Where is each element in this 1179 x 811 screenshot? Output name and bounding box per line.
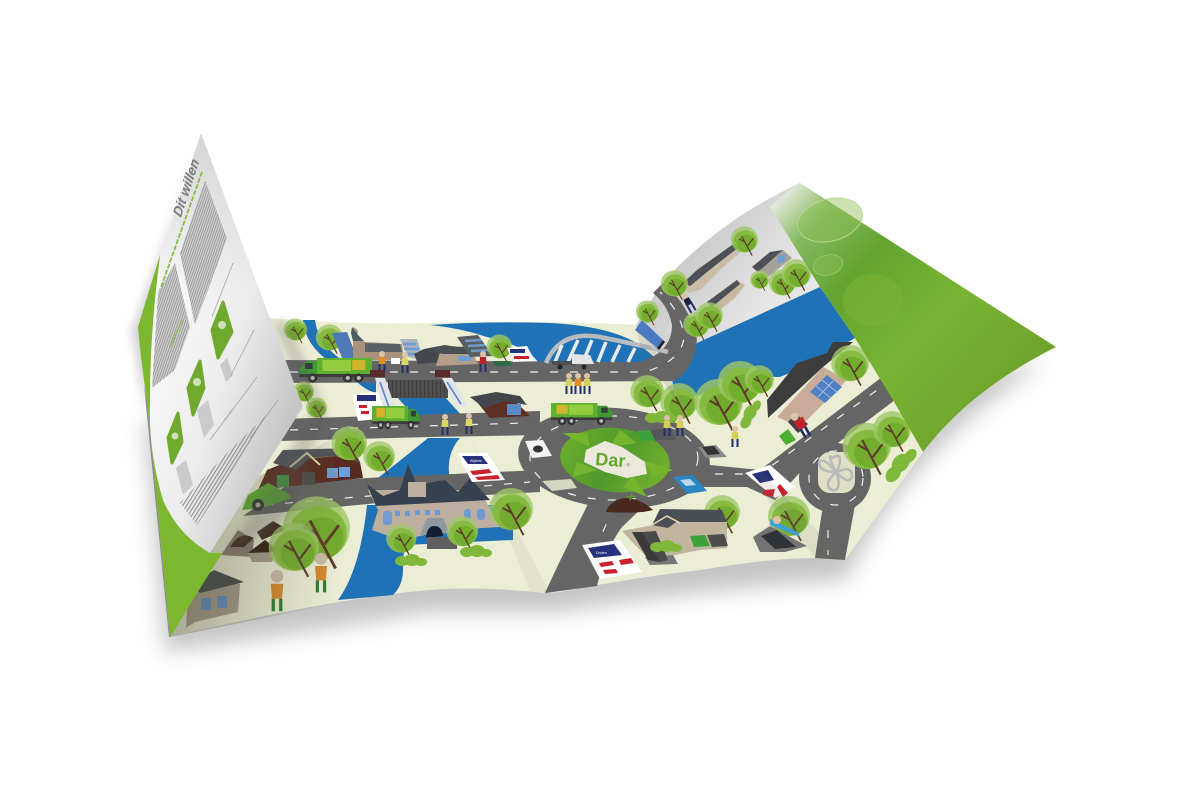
icon: second green square [188, 361, 204, 415]
detached house lower [707, 280, 745, 312]
man in dark [680, 292, 697, 313]
soap bubbles [793, 191, 903, 326]
castle [367, 464, 500, 549]
river: between middle roads [375, 438, 460, 480]
place sign: centre: Wijchen [470, 459, 482, 463]
road: south-east exit [815, 505, 855, 560]
dark bins [788, 414, 808, 433]
blue sign right pylon [442, 378, 468, 407]
solar panel field [635, 320, 665, 350]
place sign: south: Druten [596, 551, 607, 555]
place sign: east [745, 465, 795, 498]
green bin [779, 429, 796, 445]
card on road [542, 479, 577, 491]
left-bottom shading from flap [170, 440, 355, 637]
map panel: base land [170, 183, 1056, 637]
tree group: castle [386, 488, 533, 566]
garbage truck behind flap [242, 475, 292, 511]
tree behind solar office [316, 324, 343, 354]
roundabout: central ring [515, 401, 713, 515]
green section line [170, 320, 182, 347]
bridge: plaza and arch [388, 336, 668, 398]
place sign: middle left [352, 392, 387, 421]
glass building [400, 339, 424, 361]
small text next to icons [176, 358, 233, 495]
trees upper neighbourhood [636, 226, 811, 340]
office block [457, 335, 493, 357]
workers in orange vests [271, 553, 327, 611]
body text column left [152, 263, 190, 388]
house with solar roof [767, 342, 869, 445]
rivers [303, 287, 855, 600]
large trees by workers [269, 496, 350, 577]
workers on road [566, 373, 572, 394]
trees and workers centre right [630, 361, 774, 447]
upper neighbourhood: houses [635, 243, 792, 350]
fold shading [470, 325, 845, 593]
green ring [557, 422, 673, 498]
big brown farmhouse [258, 448, 363, 490]
tree and monument south-east [704, 495, 810, 552]
bike racks on road [370, 370, 450, 377]
road network [243, 283, 895, 593]
flap left soft shadow [132, 150, 198, 410]
cream centre [584, 441, 647, 478]
flower logo island [818, 452, 855, 493]
panel: white folded flap [150, 133, 303, 553]
arch bridge [546, 336, 668, 363]
upper land: housing area [636, 183, 840, 378]
green sub-heading stripe [159, 172, 202, 293]
solar office [332, 332, 357, 358]
compost mounds [221, 521, 287, 562]
dark house [414, 345, 445, 364]
icon: third green square [168, 413, 182, 463]
road markings [265, 292, 880, 555]
green cover panel [770, 183, 1056, 452]
garbage truck middle right [551, 403, 612, 425]
recycling symbol: Dar logo [557, 422, 673, 498]
red figure [789, 410, 813, 439]
orange and yellow figures [378, 351, 386, 372]
tree by office [487, 334, 512, 361]
recycling bins [637, 429, 676, 441]
bottom house with statues [622, 509, 728, 565]
lower text block [180, 410, 272, 525]
compost pile [606, 493, 653, 513]
road: middle street [280, 411, 540, 441]
body text column right [180, 180, 227, 325]
icon: first green square [212, 302, 232, 358]
truck behind bridge [552, 354, 594, 370]
row houses [683, 243, 743, 293]
apex shade [160, 133, 265, 305]
Dar wordmark: Dar [595, 449, 626, 471]
blue fuel pump [673, 475, 707, 494]
brown house [470, 392, 530, 418]
paper drop shadow [145, 362, 1045, 652]
bottom-left house [186, 570, 244, 628]
white washing machine [525, 440, 552, 458]
river: large right river [672, 287, 855, 400]
recycling arrows [562, 430, 673, 497]
place sign: south [582, 540, 642, 579]
island: east roundabout [818, 452, 855, 493]
sweepers on middle street [442, 413, 472, 435]
buildings along upper street [299, 324, 594, 416]
garbage truck on upper street [299, 358, 372, 382]
flap shadow [225, 322, 326, 556]
road: south exit [545, 500, 645, 593]
trees right lower [843, 411, 919, 485]
river: top bay [430, 322, 672, 372]
church [352, 327, 404, 360]
Dar wordmark: ® [625, 461, 631, 468]
panel: grey inner edge [144, 385, 170, 637]
panel: green back fold [138, 255, 222, 637]
heading: Dit willen [170, 156, 202, 219]
river: top left strip [303, 320, 345, 362]
blue sign left pylon [375, 378, 398, 416]
place sign: centre [457, 453, 505, 482]
river: under bridge plaza [357, 382, 464, 418]
detached house right [752, 250, 792, 277]
red figure [480, 351, 486, 372]
roundabout: east ring [799, 443, 871, 513]
tan house [436, 346, 478, 366]
manhole [698, 445, 727, 458]
road: upper street with curve [280, 283, 697, 383]
sign [507, 346, 535, 362]
green bins [493, 361, 512, 366]
tree group: top left [284, 318, 327, 420]
green-tint icons detail [172, 321, 226, 440]
road: lower street [243, 470, 540, 516]
tree group: farmhouse [331, 426, 395, 475]
thin text lines [210, 263, 278, 440]
river: castle moat and lower stream [338, 505, 513, 600]
garbage truck middle left [372, 406, 420, 429]
road: east diagonal street [690, 377, 895, 500]
